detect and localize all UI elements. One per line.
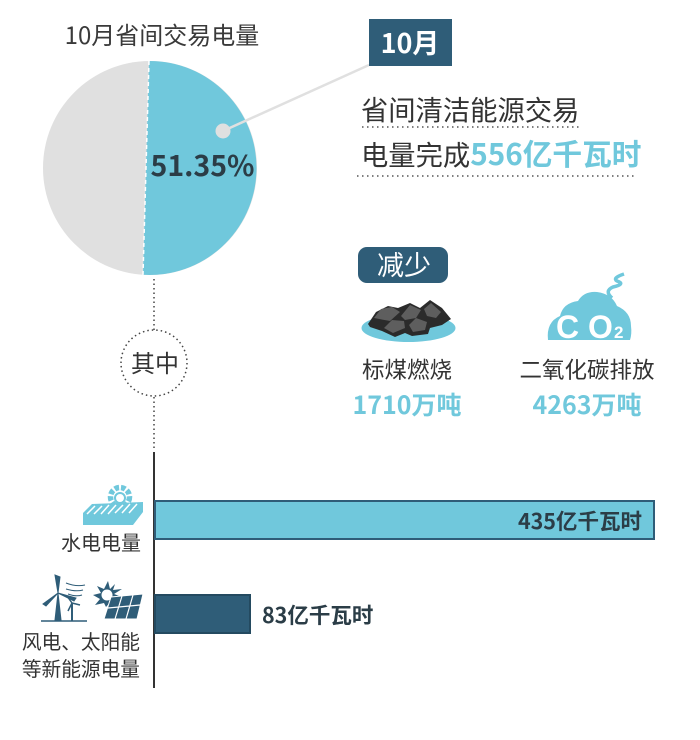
CO2 label: 二氧化碳排放 bbox=[519, 353, 655, 385]
reduction badge bbox=[358, 244, 448, 283]
icon: wind turbines bbox=[41, 575, 87, 621]
CO2 label: 4263万吨 bbox=[532, 386, 642, 422]
bar axis bbox=[153, 452, 155, 688]
pie percentage: 51.35% bbox=[151, 144, 254, 185]
wind and solar label: 等新能源电量 bbox=[22, 653, 140, 682]
connector: of which: 其中 bbox=[131, 344, 179, 379]
wind and solar label: 风电、太阳能 bbox=[22, 626, 140, 655]
icon: CO2 cloud: 2 bbox=[614, 323, 623, 342]
bar: hydro: 435亿千瓦时 bbox=[518, 505, 642, 536]
connector: of which bbox=[121, 279, 187, 450]
icon: CO2 cloud: C bbox=[556, 309, 579, 345]
coal label: 标煤燃烧 bbox=[362, 353, 452, 385]
pie chart bbox=[43, 61, 257, 275]
bar: wind and solar: 83亿千瓦时 bbox=[262, 599, 373, 630]
reduction badge: 减少 bbox=[377, 244, 431, 283]
month badge: 10月 bbox=[381, 22, 439, 61]
icon: CO2 cloud: O bbox=[588, 309, 613, 345]
coal label: 1710万吨 bbox=[352, 386, 462, 422]
headline text bbox=[357, 88, 641, 176]
hydro label: 水电电量 bbox=[61, 527, 141, 556]
CO2 label bbox=[519, 353, 655, 422]
callout leader line bbox=[216, 65, 369, 138]
icon: coal bbox=[362, 300, 456, 342]
bar: hydro bbox=[155, 501, 654, 539]
headline text: 电量完成556亿千瓦时 bbox=[361, 131, 641, 174]
wind and solar label bbox=[22, 626, 140, 682]
bar: wind and solar bbox=[155, 595, 373, 633]
title: pie heading: 10月省间交易电量 bbox=[65, 16, 259, 51]
icon: CO2 cloud bbox=[548, 274, 631, 345]
headline text: 省间清洁能源交易 bbox=[361, 88, 579, 128]
icon: hydro bbox=[83, 488, 143, 525]
icon: solar panel bbox=[93, 581, 143, 619]
month badge bbox=[369, 19, 452, 66]
coal label bbox=[352, 353, 462, 422]
